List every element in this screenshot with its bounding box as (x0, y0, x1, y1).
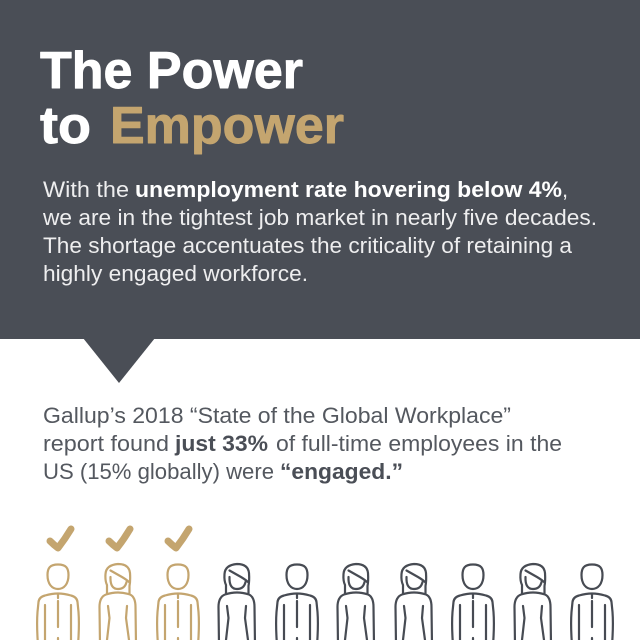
intro text block: The shortage accentuates the criticality of retaining a (43, 233, 573, 258)
Gallup finding text block: just 33% (174, 431, 268, 456)
title: to (40, 97, 91, 155)
people pictogram: 10 figures, 3 highlighted (37, 564, 613, 640)
intro text block: we are in the tightest job market in nearly five decades. (42, 205, 597, 230)
intro text block: highly engaged workforce. (43, 261, 308, 286)
Gallup finding text block: Gallup’s 2018 “State of the Global Workplace” (43, 403, 511, 428)
title (40, 42, 344, 155)
Gallup finding text block: US (15% globally) were (43, 459, 274, 484)
title: Empower (110, 97, 344, 155)
intro text block: With the (43, 177, 129, 202)
intro text block (42, 177, 597, 286)
Gallup finding text block: of full-time employees in the (276, 431, 562, 456)
icon: check marks (50, 529, 189, 548)
Gallup finding text block (43, 403, 562, 484)
intro text block: unemployment rate hovering below 4% (135, 177, 562, 202)
title: The Power (40, 42, 303, 100)
header panel (0, 0, 640, 383)
intro text block: , (562, 177, 568, 202)
Gallup finding text block: “engaged.” (280, 459, 403, 484)
Gallup finding text block: report found (43, 431, 169, 456)
